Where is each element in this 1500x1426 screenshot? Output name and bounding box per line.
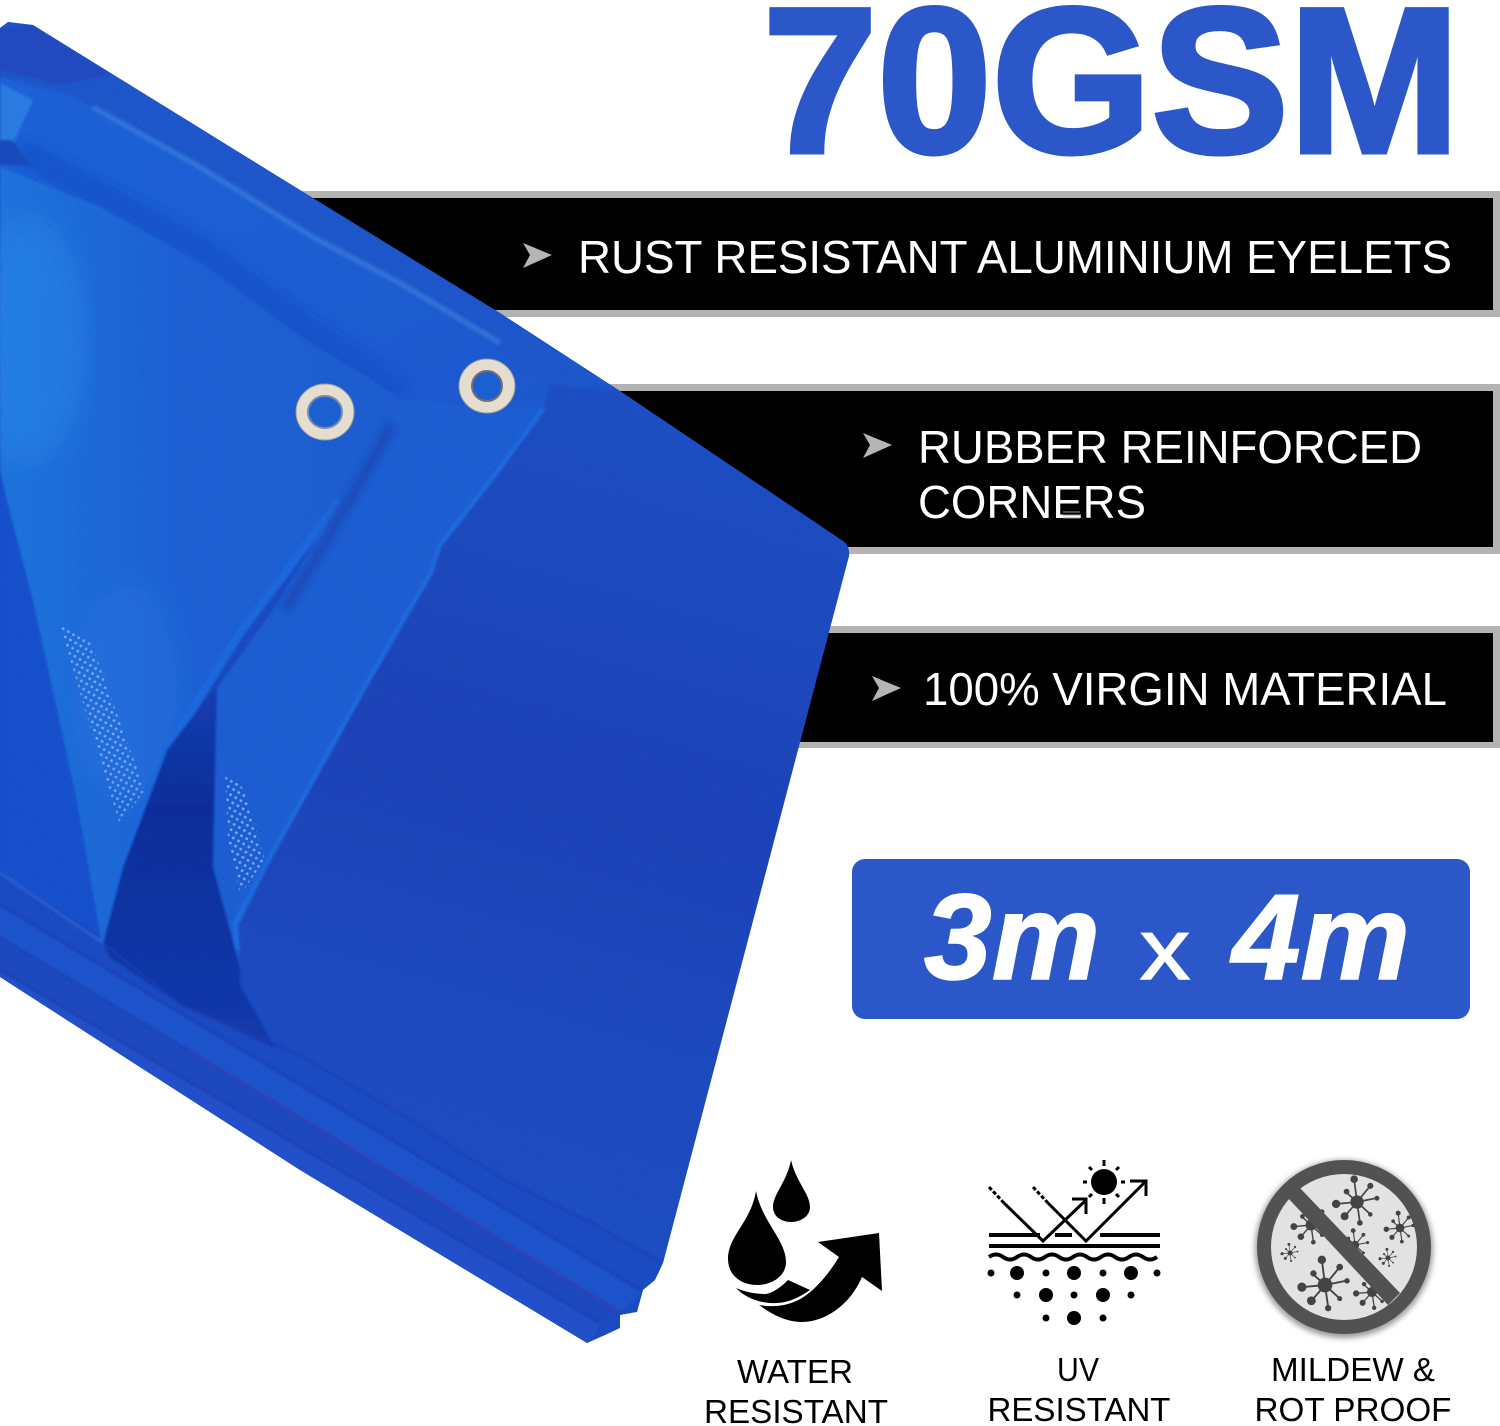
arrow bullet: corners bbox=[863, 433, 892, 458]
feature bar: rubber reinforced corners bbox=[600, 384, 1500, 554]
shadow pocket between folds bbox=[102, 683, 274, 1047]
feature bar: rust resistant aluminium eyelets bbox=[290, 191, 1500, 317]
arrow bullet: eyelets bbox=[523, 243, 552, 268]
text: rubber reinforced corners: CORNERS bbox=[918, 476, 1146, 528]
specular highlights bbox=[60, 625, 145, 825]
product photo: blue tarpaulin bbox=[0, 0, 860, 1350]
size text: 4m bbox=[1229, 869, 1410, 1005]
front sheet bbox=[238, 385, 850, 1263]
light fold A bbox=[0, 167, 403, 943]
icon: UV resistant bbox=[988, 1160, 1160, 1325]
label: UV resistant: UV bbox=[1057, 1351, 1099, 1388]
label: mildew and rot proof: MILDEW & bbox=[1271, 1351, 1435, 1388]
eyelet left bbox=[296, 384, 354, 440]
arrow bullet: material bbox=[872, 676, 901, 701]
text: rubber reinforced corners: RUBBER REINFORCED bbox=[918, 421, 1422, 473]
stacked folded layers bbox=[0, 905, 643, 1312]
text: 100% virgin material: 100% VIRGIN MATERIAL bbox=[923, 663, 1447, 715]
size text: x bbox=[1140, 902, 1190, 998]
label: water resistant: WATER bbox=[737, 1353, 853, 1390]
icon: mildew and rot proof bbox=[1255, 1160, 1433, 1338]
size text: 3m bbox=[924, 869, 1100, 1005]
top hem strip bbox=[0, 22, 620, 392]
icon: water resistant bbox=[728, 1160, 882, 1322]
weave texture bbox=[62, 630, 262, 889]
fold B hem panel bbox=[213, 400, 545, 967]
eyelet right bbox=[459, 359, 515, 413]
hem band bbox=[0, 77, 548, 410]
feature bar: 100% virgin material bbox=[780, 626, 1500, 748]
text: rust resistant aluminium eyelets: RUST RESISTANT ALUMINIUM EYELETS bbox=[578, 231, 1452, 283]
size badge: 3m x 4m bbox=[852, 859, 1470, 1019]
back sheet, left edge bbox=[0, 160, 100, 933]
